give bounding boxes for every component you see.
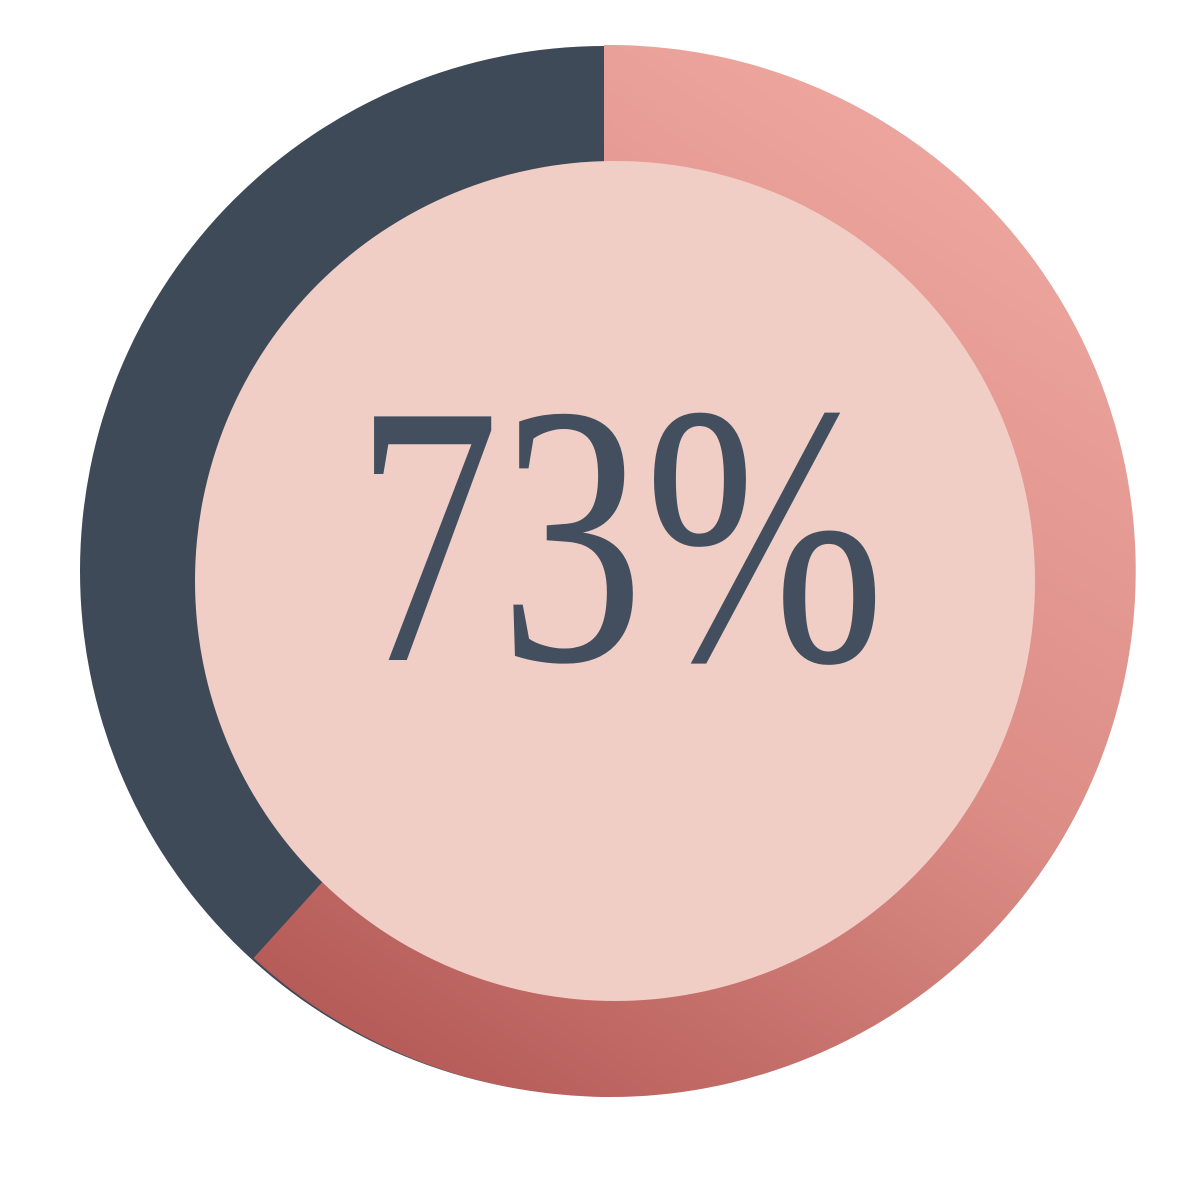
value label: 73% xyxy=(355,330,885,741)
segment: 73% pink xyxy=(255,46,1135,1096)
inner circle xyxy=(195,161,1035,1001)
donut ring xyxy=(80,46,1135,1096)
segment: dark remainder xyxy=(80,46,1130,1096)
